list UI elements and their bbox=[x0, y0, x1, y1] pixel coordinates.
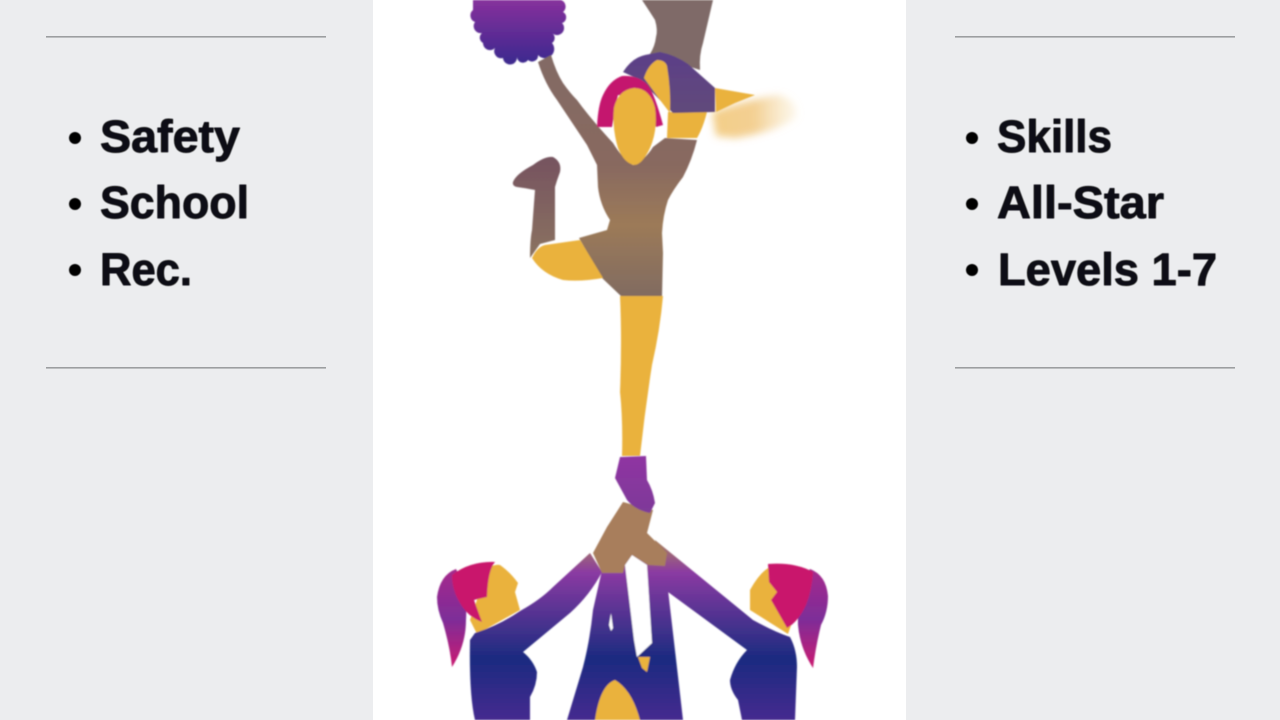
bullet list: left bbox=[69, 111, 249, 295]
flyer upper leg bbox=[642, 0, 713, 70]
flyer leg and foot bbox=[513, 157, 560, 258]
right base ponytail bbox=[798, 569, 828, 668]
flyer shoe bbox=[615, 456, 655, 513]
panel: left bbox=[0, 0, 373, 720]
left base body and arm bbox=[470, 553, 602, 720]
left base hair bbox=[452, 562, 495, 622]
flyer kicking ankle bbox=[715, 88, 755, 112]
bullet list: left: Safety bbox=[100, 111, 240, 162]
center base body bbox=[567, 553, 683, 720]
joined hands bbox=[593, 502, 667, 573]
left base ponytail bbox=[437, 569, 466, 667]
flyer raised thigh bbox=[532, 240, 603, 281]
flyer hair bbox=[597, 76, 663, 127]
bullet list: right: Skills bbox=[997, 111, 1112, 162]
flyer lower yellow bbox=[667, 112, 707, 138]
illustration: base cheerleaders bbox=[437, 456, 828, 720]
motion blur: kicking foot bbox=[712, 95, 797, 138]
center base arch bbox=[595, 680, 640, 720]
center base sliver bbox=[609, 613, 613, 631]
bullet list: left: School bbox=[100, 177, 249, 228]
bullet list: right bbox=[966, 111, 1217, 295]
right base body and arm bbox=[655, 540, 797, 720]
flyer standing leg bbox=[620, 296, 663, 456]
bullet list: right: Levels 1-7 bbox=[998, 244, 1217, 295]
bullet list: right: All-Star bbox=[997, 177, 1164, 228]
flyer skirt bbox=[623, 52, 715, 113]
center base white gap bbox=[625, 555, 652, 657]
center base ankle bbox=[638, 657, 650, 672]
left base face bbox=[470, 565, 520, 634]
bullet list: left: Rec. bbox=[100, 244, 192, 295]
illustration: flyer cheerleader bbox=[470, 0, 797, 456]
flyer face bbox=[614, 88, 656, 165]
flyer arm and torso bbox=[538, 55, 697, 297]
panel: right bbox=[906, 0, 1280, 720]
pom-pom bbox=[470, 0, 566, 65]
right base face bbox=[750, 567, 800, 634]
flyer thigh bbox=[644, 60, 670, 113]
right base hair bbox=[768, 564, 813, 628]
